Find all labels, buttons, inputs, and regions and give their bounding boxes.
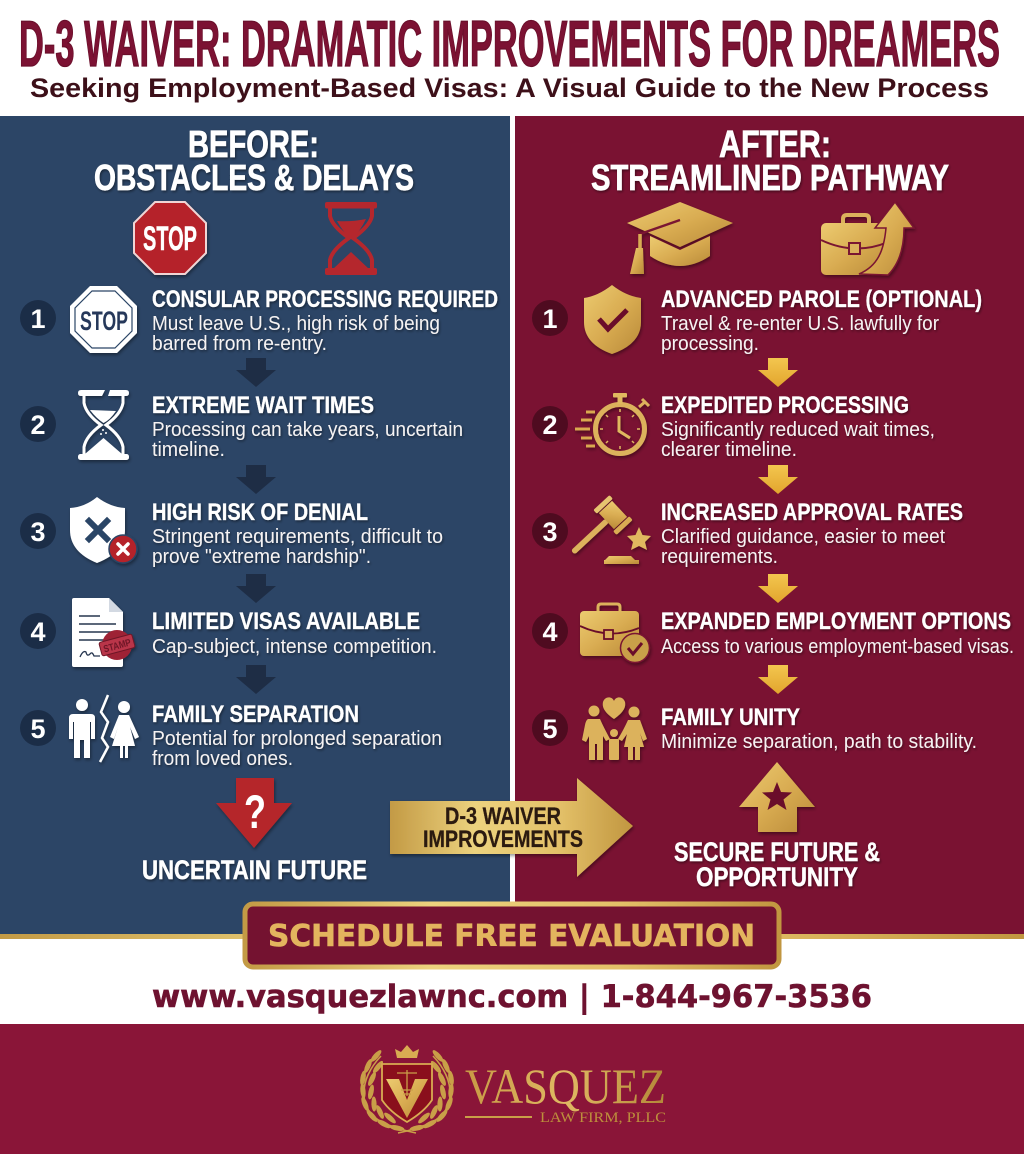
arrow down — [758, 465, 798, 494]
step 5: family unity — [532, 697, 977, 760]
shield with V — [382, 1064, 432, 1122]
number badge 4 — [532, 613, 568, 649]
number badge 1 — [20, 300, 56, 336]
step text: from loved ones. — [152, 748, 293, 770]
icon: gold shield with check — [584, 285, 641, 354]
step text: INCREASED APPROVAL RATES — [661, 499, 963, 526]
step text: barred from re-entry. — [152, 333, 327, 355]
arrow: D-3 waiver improvements: D-3 WAIVER — [445, 803, 561, 830]
step text — [661, 286, 982, 355]
outcome: uncertain future — [142, 778, 367, 885]
step 4: limited visas — [20, 598, 437, 667]
logo wordmark: LAW FIRM, PLLC — [540, 1110, 666, 1126]
outcome label: SECURE FUTURE & — [674, 837, 880, 867]
number badge 5 — [20, 710, 56, 746]
contact line: www.vasquezlawnc.com | 1-844-967-3536 — [152, 979, 872, 1015]
step 4: employment options — [532, 604, 1014, 662]
number badge 4: 4 — [542, 617, 558, 647]
after heading: STREAMLINED PATHWAY — [591, 157, 949, 198]
step 2: expedited processing — [532, 392, 935, 461]
step text: Potential for prolonged separation — [152, 728, 442, 750]
step text: Clarified guidance, easier to meet — [661, 526, 945, 548]
step text — [152, 286, 498, 355]
laurel wreath left — [359, 1049, 416, 1133]
button: schedule free evaluation: SCHEDULE FREE EVALUATION — [268, 919, 755, 954]
step text: LIMITED VISAS AVAILABLE — [152, 608, 420, 635]
icon: graduation cap — [627, 202, 733, 274]
icon: shield with x — [70, 497, 137, 563]
panel: before — [0, 116, 510, 934]
arrow: D-3 waiver improvements: IMPROVEMENTS — [423, 826, 583, 853]
step text: Must leave U.S., high risk of being — [152, 313, 440, 335]
icon: white stop sign: STOP — [80, 306, 128, 336]
step text — [152, 499, 443, 568]
number badge 1: 1 — [30, 304, 46, 334]
step 1: advanced parole — [532, 285, 982, 355]
crown — [395, 1045, 419, 1058]
number badge 4: 4 — [30, 617, 46, 647]
arrow down — [758, 574, 798, 603]
arrow down — [758, 358, 798, 387]
panel: after — [515, 116, 1024, 934]
gold divider band — [0, 934, 1024, 939]
number badge 3 — [20, 513, 56, 549]
step text: processing. — [661, 333, 759, 355]
step 2: wait times — [20, 390, 463, 461]
icon: gold stopwatch — [575, 393, 649, 454]
number badge 5: 5 — [30, 714, 46, 744]
icon: separated man and woman — [69, 695, 139, 762]
step 5: family separation — [20, 695, 442, 770]
number badge 2: 2 — [542, 410, 558, 440]
icon: gold up arrow with star — [739, 762, 815, 832]
step text: EXTREME WAIT TIMES — [152, 392, 374, 419]
step text — [152, 392, 463, 461]
icon: red question arrow — [216, 778, 292, 848]
step text: HIGH RISK OF DENIAL — [152, 499, 368, 526]
number badge 5 — [532, 710, 568, 746]
icon: red stop sign — [134, 202, 206, 274]
step text — [661, 499, 963, 568]
icon: red hourglass — [325, 202, 377, 275]
icon: document with stamp: STAMP — [102, 637, 133, 655]
number badge 1: 1 — [542, 304, 558, 334]
arrow down — [236, 358, 276, 387]
number badge 2 — [20, 406, 56, 442]
step text — [152, 608, 437, 658]
number badge 5: 5 — [542, 714, 558, 744]
arrow down — [236, 574, 276, 603]
step text: Stringent requirements, difficult to — [152, 526, 443, 548]
number badge 2 — [532, 406, 568, 442]
laurel wreath right — [398, 1049, 455, 1133]
before heading: OBSTACLES & DELAYS — [94, 157, 414, 198]
icon: briefcase with rising arrow — [821, 202, 914, 275]
outcome label — [674, 837, 880, 892]
arrow down — [758, 665, 798, 694]
icon: gold family with heart — [582, 697, 647, 760]
icon: white hourglass — [78, 390, 129, 460]
step text: requirements. — [661, 546, 778, 568]
step 1: consular processing — [20, 286, 498, 355]
number badge 3: 3 — [542, 517, 558, 547]
icon: gavel and star — [561, 495, 651, 565]
step text — [661, 608, 1014, 658]
outcome label: OPPORTUNITY — [696, 862, 858, 892]
step text: EXPEDITED PROCESSING — [661, 392, 909, 419]
arrow: D-3 waiver improvements — [390, 778, 633, 877]
step text: Processing can take years, uncertain — [152, 419, 463, 441]
step text: CONSULAR PROCESSING REQUIRED — [152, 286, 498, 313]
logo wordmark: VASQUEZ — [465, 1058, 666, 1114]
step text: clearer timeline. — [661, 439, 797, 461]
step text: FAMILY SEPARATION — [152, 701, 359, 728]
step text: Cap-subject, intense competition. — [152, 636, 437, 658]
arrow down — [236, 665, 276, 694]
icon: document with stamp — [72, 598, 135, 667]
step text: FAMILY UNITY — [661, 704, 800, 731]
number badge 1 — [532, 300, 568, 336]
step text: Minimize separation, path to stability. — [661, 731, 977, 753]
button: schedule free evaluation — [245, 904, 779, 967]
number badge 3 — [532, 513, 568, 549]
step text: Significantly reduced wait times, — [661, 419, 935, 441]
number badge 3: 3 — [30, 517, 46, 547]
step 3: approval rates — [532, 495, 963, 568]
before heading: BEFORE: — [188, 124, 319, 166]
icon: white stop sign — [70, 286, 137, 353]
footer — [0, 1024, 1024, 1154]
arrow down — [236, 465, 276, 494]
after heading — [591, 124, 949, 198]
subtitle: Seeking Employment-Based Visas: A Visual Guide to the New Process — [30, 73, 989, 103]
after heading: AFTER: — [719, 124, 831, 166]
icon: red stop sign: STOP — [143, 220, 197, 258]
logo emblem — [359, 1045, 455, 1133]
step text: timeline. — [152, 439, 225, 461]
step text — [152, 701, 442, 770]
number badge 2: 2 — [30, 410, 46, 440]
outcome: secure future — [674, 762, 880, 892]
number badge 4 — [20, 613, 56, 649]
step text: prove "extreme hardship". — [152, 546, 371, 568]
before heading — [94, 124, 414, 198]
outcome label: UNCERTAIN FUTURE — [142, 855, 367, 885]
step text — [661, 704, 977, 753]
icon: briefcase with check — [580, 604, 650, 662]
icon: red question arrow: ? — [244, 785, 266, 838]
step text — [661, 392, 935, 461]
step 3: denial — [20, 497, 443, 568]
step text: Travel & re-enter U.S. lawfully for — [661, 313, 939, 335]
